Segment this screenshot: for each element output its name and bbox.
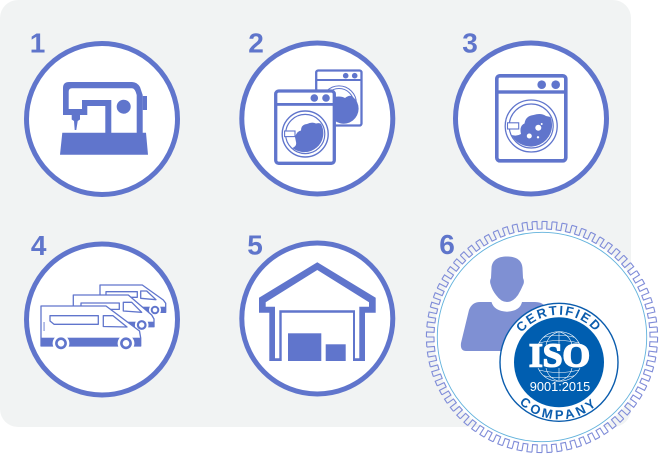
front van	[41, 306, 141, 352]
number 2: 2	[248, 28, 264, 59]
number 1: 1	[30, 28, 45, 59]
icon: van fleet	[41, 285, 166, 352]
icon: rear washing machine	[316, 70, 362, 126]
step 3: washing	[456, 28, 606, 194]
globe top and bottom	[538, 332, 580, 381]
icon: front washing machine	[275, 91, 335, 163]
step 6: certified staff seal	[426, 220, 658, 454]
thin inner ring	[437, 232, 647, 442]
icon: washing machine	[496, 76, 567, 161]
middle van	[73, 295, 154, 332]
step 4: transport	[26, 230, 178, 395]
badge ring	[500, 303, 618, 421]
seal disc	[434, 229, 650, 445]
circle 2	[242, 43, 393, 194]
standard number: 9001:2015	[530, 379, 590, 394]
number 6: 6	[439, 229, 455, 260]
icon: warehouse	[259, 262, 376, 361]
circle 1	[26, 44, 178, 194]
circle 4	[26, 244, 178, 395]
circle 5	[242, 243, 393, 394]
arc text: certified: CERTIFIED	[517, 306, 600, 331]
gear edge	[426, 221, 658, 453]
badge blue disc	[514, 317, 604, 407]
step 2: washing	[242, 28, 393, 194]
arc text: company: COMPANY	[521, 398, 594, 420]
ISO wordmark: ISO	[529, 338, 590, 375]
number 4: 4	[31, 230, 47, 261]
circle 3	[456, 43, 606, 194]
rear van	[100, 285, 166, 316]
number 3: 3	[462, 28, 478, 59]
icon: person	[461, 256, 560, 351]
icon: sewing machine	[60, 82, 148, 155]
step 1: sewing	[26, 28, 178, 195]
number 5: 5	[247, 230, 263, 260]
step 5: warehouse	[242, 230, 393, 394]
badge: ISO 9001:2015 certified company	[499, 302, 619, 422]
